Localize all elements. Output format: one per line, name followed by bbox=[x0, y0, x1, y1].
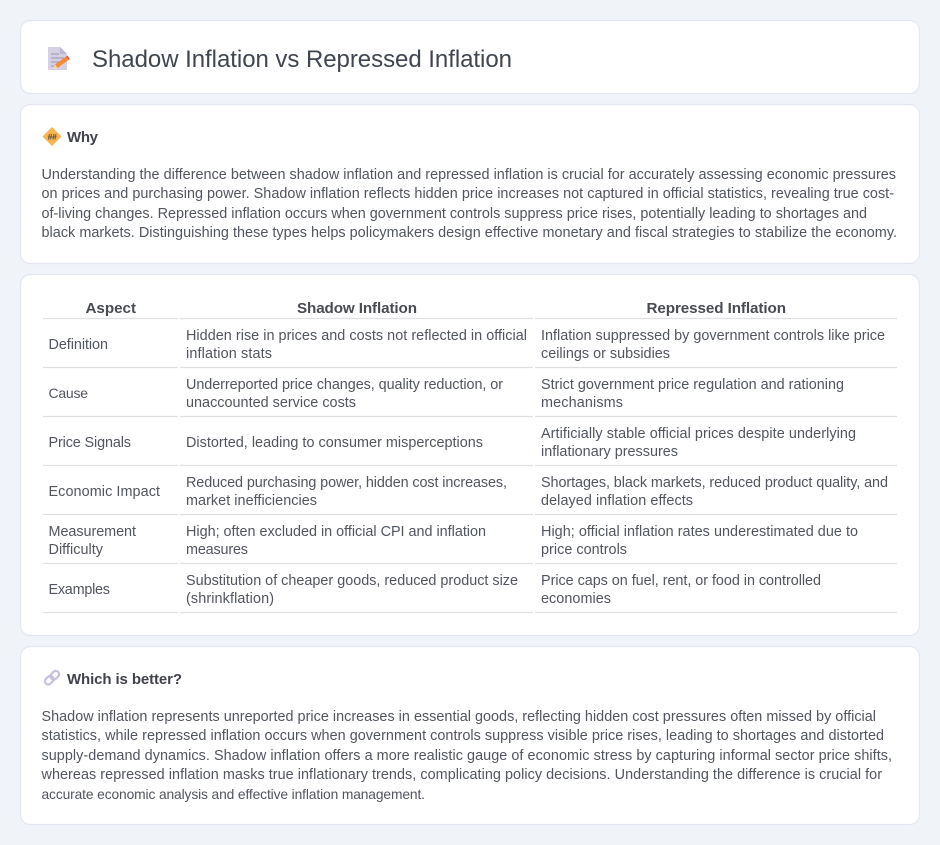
table row: measurement difficulty: High; often excluded in official CPI and inflation bbox=[186, 524, 486, 540]
table row: cause: Strict government price regulation and rationing bbox=[541, 377, 844, 393]
table row: price signals: Artificially stable official prices despite underlying bbox=[541, 426, 856, 442]
table header row bbox=[86, 300, 786, 317]
heading: why: Why bbox=[67, 129, 99, 146]
icon: memo with pencil bbox=[48, 47, 70, 70]
table row: economic impact: delayed inflation effects bbox=[541, 493, 693, 509]
table row: economic impact: Shortages, black markets, reduced product quality, and bbox=[541, 475, 888, 491]
icon: chain link bbox=[44, 670, 60, 686]
table row: measurement difficulty: measures bbox=[186, 542, 248, 558]
table row: examples: Price caps on fuel, rent, or food in controlled bbox=[541, 573, 821, 589]
table row: cause: unaccounted service costs bbox=[186, 395, 356, 411]
table row: price signals bbox=[48, 426, 856, 460]
text block: which is better paragraph bbox=[40, 709, 892, 802]
text block: why paragraph: on prices and purchasing power. Shadow inflation reflects hidden price increases not captured in official statistics, revealing true cost- bbox=[42, 186, 894, 202]
table row: measurement difficulty: Difficulty bbox=[48, 542, 104, 558]
table row: definition: Hidden rise in prices and costs not reflected in official bbox=[186, 328, 527, 344]
panel: which is better bbox=[20, 646, 920, 824]
table row: examples: economies bbox=[541, 591, 611, 607]
table row: economic impact: Reduced purchasing power, hidden cost increases, bbox=[186, 475, 507, 491]
table row: cause: Cause bbox=[48, 385, 88, 401]
panel: comparison table bbox=[20, 274, 920, 636]
heading: which is better: Which is better? bbox=[67, 671, 182, 688]
text block: why paragraph: of-living changes. Repressed inflation occurs when government controls suppress price rises, potentially leading to shortages and bbox=[42, 206, 867, 222]
table row: cause: mechanisms bbox=[541, 395, 623, 411]
table row: definition: Inflation suppressed by government controls like price bbox=[541, 328, 885, 344]
text block: why paragraph: Understanding the difference between shadow inflation and repressed inflation is crucial for accurately assessing economic pressures bbox=[42, 167, 896, 183]
table header row: Aspect bbox=[86, 300, 136, 317]
table row: cause bbox=[48, 377, 844, 411]
table row: price signals: inflationary pressures bbox=[541, 444, 678, 460]
table row: definition bbox=[48, 328, 885, 362]
table row: economic impact bbox=[48, 475, 888, 509]
text block: which is better paragraph: statistics, while repressed inflation occurs when government controls suppress visible price rises, leading to shortages and distorted bbox=[42, 728, 884, 744]
table header row: Repressed Inflation bbox=[646, 300, 786, 317]
text block: which is better paragraph: Shadow inflation represents unreported price increases in essential goods, reflecting hidden cost pressures often missed by official bbox=[42, 709, 876, 725]
panel: why bbox=[20, 104, 920, 264]
table row: price signals: Distorted, leading to consumer misperceptions bbox=[186, 435, 483, 451]
table row: examples: (shrinkflation) bbox=[186, 591, 274, 607]
text block: why paragraph bbox=[42, 167, 897, 241]
table row: economic impact: market inefficiencies bbox=[186, 493, 317, 509]
text block: why paragraph: black markets. Distinguishing these types helps policymakers design effective monetary and fiscal strategies to stabilize the economy. bbox=[42, 225, 897, 241]
table row: definition: Definition bbox=[48, 337, 108, 353]
table row: definition: ceilings or subsidies bbox=[541, 346, 670, 362]
panel: title header bbox=[20, 20, 920, 94]
table row: definition: inflation stats bbox=[186, 346, 272, 362]
table header row: Shadow Inflation bbox=[297, 300, 417, 317]
table row: measurement difficulty: High; official inflation rates underestimated due to bbox=[541, 524, 858, 540]
table row: examples: Examples bbox=[48, 582, 110, 598]
text block: which is better paragraph: supply-demand dynamics. Shadow inflation offers a more realistic gauge of economic stress by capturing informal sector price shifts, bbox=[42, 748, 892, 764]
table row: measurement difficulty bbox=[48, 524, 858, 558]
title: Shadow Inflation vs Repressed Inflation bbox=[92, 46, 512, 73]
icon: warning diamond bbox=[44, 128, 60, 145]
table row: price signals: Price Signals bbox=[48, 435, 131, 451]
table row: economic impact: Economic Impact bbox=[48, 484, 160, 500]
text block: which is better paragraph: accurate economic analysis and effective inflation management. bbox=[42, 787, 425, 802]
text block: which is better paragraph: whereas repressed inflation masks true inflationary trends, complicating policy decisions. Understanding the difference is crucial for bbox=[40, 767, 882, 783]
table row: measurement difficulty: price controls bbox=[541, 542, 627, 558]
table row: measurement difficulty: Measurement bbox=[48, 524, 136, 540]
table row: cause: Underreported price changes, quality reduction, or bbox=[186, 377, 503, 393]
table row: examples: Substitution of cheaper goods, reduced product size bbox=[186, 573, 518, 589]
table row: examples bbox=[48, 573, 821, 607]
